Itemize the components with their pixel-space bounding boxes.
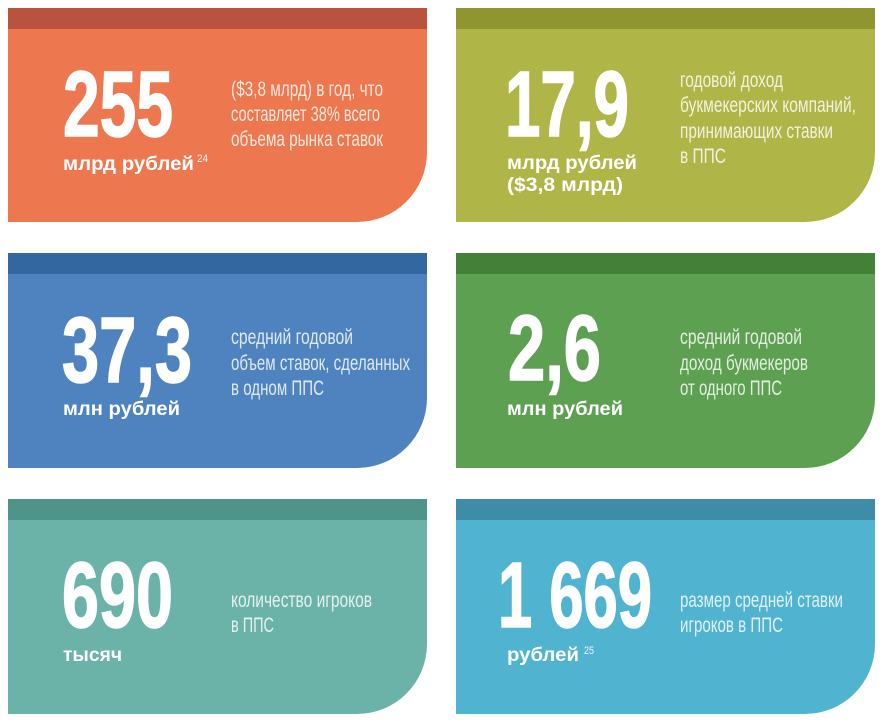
description: игроков в ППС (680, 614, 783, 637)
panel: 2,6 million rubles (456, 253, 875, 468)
panel: 37,3 million rubles (8, 253, 427, 468)
description: ($3,8 млрд) в год, что (231, 78, 383, 101)
panel: 255 billion rubles (8, 8, 427, 222)
number: 17,9: 17,9 (505, 52, 629, 156)
label: thousand: тысяч (63, 645, 122, 666)
label: million rubles: млн рублей (63, 399, 180, 420)
description: принимающих ставки (680, 120, 833, 143)
description: доход букмекеров (680, 352, 808, 375)
footnote 24: 24 (197, 153, 208, 165)
description: средний годовой (231, 326, 353, 349)
description: количество игроков (231, 589, 372, 612)
label: billion rubles: млрд рублей (63, 154, 194, 175)
description: объема рынка ставок (231, 128, 384, 151)
description: от одного ППС (680, 377, 782, 400)
description: в одном ППС (231, 377, 324, 400)
description: составляет 38% всего (231, 103, 380, 126)
description: годовой доход (680, 69, 783, 92)
footnote 25: 25 (584, 645, 594, 657)
label: million rubles: млн рублей (507, 399, 623, 420)
panel: 690 thousand (8, 499, 427, 714)
number: 2,6: 2,6 (508, 296, 601, 400)
description: объем ставок, сделанных (231, 352, 410, 375)
panel: 17,9 billion rubles (456, 8, 875, 222)
description (680, 326, 808, 400)
description: средний годовой (680, 326, 802, 349)
description: в ППС (680, 145, 726, 168)
description (231, 326, 410, 400)
label: billion rubles ($3.8 billion): ($3,8 млрд) (507, 175, 623, 196)
number: 255: 255 (63, 52, 173, 156)
description (680, 589, 843, 637)
number: 1 669: 1 669 (498, 543, 652, 647)
description (231, 589, 372, 637)
panel: 1 669 rubles (456, 499, 875, 714)
number: 37,3: 37,3 (62, 298, 192, 402)
label: rubles: рублей (507, 645, 579, 666)
description (231, 78, 384, 151)
label: billion rubles ($3.8 billion) (507, 153, 637, 196)
description (680, 69, 856, 168)
description: в ППС (231, 614, 274, 637)
label: billion rubles ($3.8 billion): млрд рублей (507, 153, 637, 174)
number: 690: 690 (62, 543, 173, 647)
